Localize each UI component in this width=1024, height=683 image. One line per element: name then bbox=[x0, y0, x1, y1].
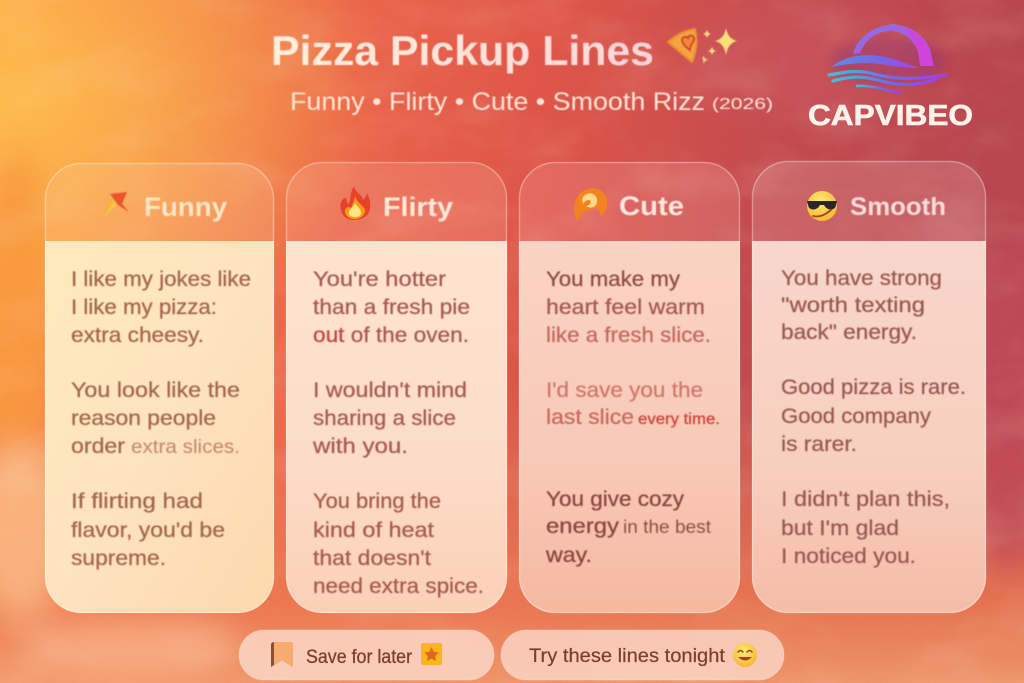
button label: Try these lines tonight bbox=[529, 646, 726, 667]
lines: cute: last slice bbox=[546, 406, 634, 429]
lines: cute: energy bbox=[546, 515, 620, 538]
lines: flirty: You're hotter bbox=[313, 268, 446, 291]
icon: star bbox=[421, 643, 442, 665]
panel: funny bbox=[45, 163, 274, 613]
button label: Save for later bbox=[306, 647, 413, 668]
lines: cute: in the best bbox=[623, 517, 711, 537]
panel header: funny bbox=[45, 163, 274, 241]
lines: smooth: Good company bbox=[781, 405, 932, 428]
lines: smooth: but I'm glad bbox=[781, 517, 899, 540]
lines: funny: extra slices. bbox=[131, 436, 240, 458]
heading: smooth: Smooth bbox=[850, 193, 946, 221]
icon: sparkles bbox=[702, 28, 737, 64]
lines: smooth bbox=[781, 267, 966, 568]
lines: cute: like a fresh slice. bbox=[546, 324, 711, 347]
icon: sunglasses face bbox=[807, 191, 837, 221]
lines: funny: order bbox=[71, 435, 125, 458]
lines: flirty: You bring the bbox=[313, 490, 441, 513]
title: Pizza Pickup Lines bbox=[271, 27, 654, 74]
icon: cap bbox=[831, 24, 934, 68]
lines: flirty: than a fresh pie bbox=[313, 296, 470, 319]
lines: flirty: kind of heat bbox=[313, 519, 434, 542]
lines: cute: You make my bbox=[546, 268, 681, 291]
lines: smooth: You have strong bbox=[781, 267, 942, 290]
lines: flirty: out of the oven. bbox=[313, 324, 469, 347]
heading: flirty: Flirty bbox=[383, 192, 453, 222]
lines: funny: If flirting had bbox=[71, 490, 203, 513]
icon: flame bbox=[340, 186, 370, 220]
lines: flirty: that doesn't bbox=[313, 547, 431, 570]
lines: flirty: with you. bbox=[312, 435, 408, 458]
lines: funny: reason people bbox=[71, 407, 216, 430]
lines: cute: every time. bbox=[638, 411, 720, 428]
lines: cute: way. bbox=[545, 544, 592, 567]
lines: smooth: Good pizza is rare. bbox=[781, 376, 966, 399]
panel header: smooth bbox=[752, 161, 986, 241]
lines: smooth: I noticed you. bbox=[781, 545, 916, 568]
lines: cute: You give cozy bbox=[546, 488, 685, 511]
lines: funny: I like my jokes like bbox=[71, 268, 251, 291]
logo wordmark: CAPVIBEO bbox=[808, 100, 973, 132]
lines: cute bbox=[545, 268, 720, 567]
panel header: flirty bbox=[286, 162, 507, 241]
icon: pizza kite bbox=[102, 192, 129, 219]
lines: funny bbox=[71, 268, 251, 570]
panel: cute bbox=[519, 162, 740, 613]
panel header: cute bbox=[519, 162, 740, 241]
lines: smooth: "worth texting bbox=[781, 294, 925, 317]
lines: flirty: sharing a slice bbox=[313, 407, 456, 430]
lines: funny: extra cheesy. bbox=[71, 324, 204, 347]
panel: smooth bbox=[752, 161, 986, 613]
icon: swirl flame bbox=[574, 188, 607, 221]
subtitle: (2026) bbox=[712, 96, 773, 113]
button: save for later bbox=[239, 630, 494, 680]
lines: smooth: is rarer. bbox=[781, 433, 857, 456]
lines: funny: supreme. bbox=[71, 547, 166, 570]
lines: flirty: I wouldn't mind bbox=[313, 379, 467, 402]
lines: flirty: need extra spice. bbox=[313, 575, 484, 598]
lines: cute: I'd save you the bbox=[546, 379, 703, 402]
icon: smile bbox=[733, 643, 757, 667]
lines: funny: You look like the bbox=[71, 379, 240, 402]
lines: funny: flavor, you'd be bbox=[71, 519, 225, 542]
icon: waves bbox=[829, 72, 946, 93]
heading: cute: Cute bbox=[619, 191, 684, 221]
button: try these lines bbox=[501, 630, 784, 680]
lines: smooth: I didn't plan this, bbox=[781, 488, 950, 511]
panel: flirty bbox=[286, 162, 507, 613]
lines: flirty bbox=[312, 268, 484, 598]
lines: cute: heart feel warm bbox=[546, 296, 705, 319]
subtitle: Funny • Flirty • Cute • Smooth Rizz bbox=[290, 88, 705, 116]
lines: smooth: back" energy. bbox=[781, 321, 917, 344]
logo: Capvibeo bbox=[808, 24, 973, 132]
icon: bookmark bbox=[271, 642, 293, 667]
lines: funny: I like my pizza: bbox=[71, 296, 217, 319]
icon: pizza slice with heart bbox=[668, 29, 696, 62]
heading: funny: Funny bbox=[144, 192, 227, 222]
